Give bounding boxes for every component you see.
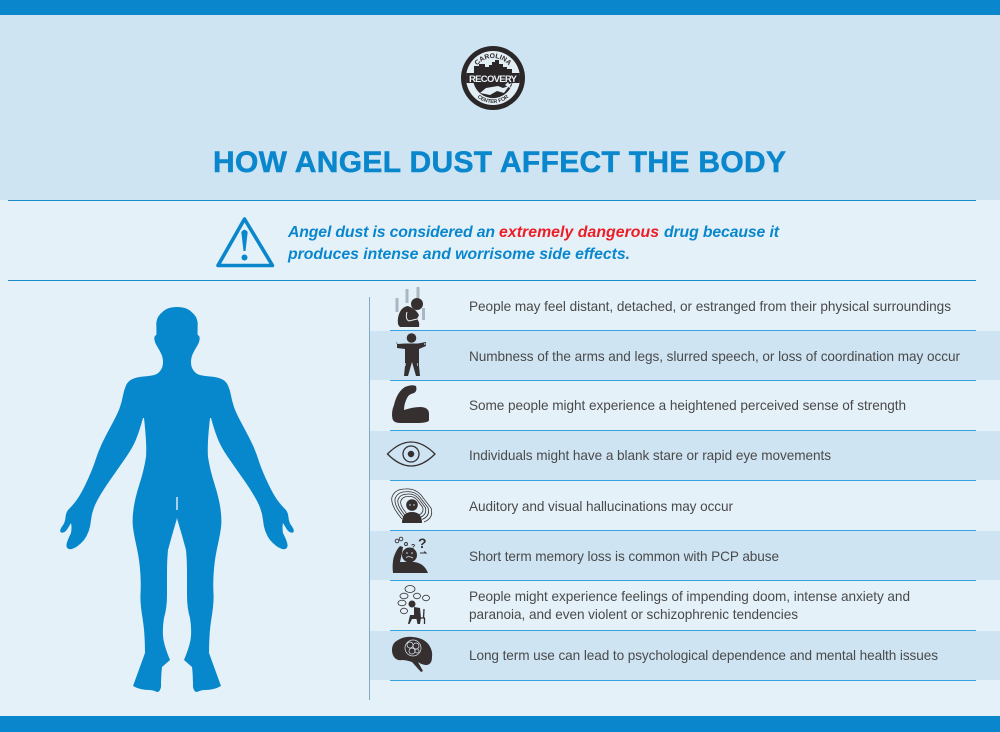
text: Some people might experience a heightened perceived sense of strength — [469, 398, 906, 413]
header background — [0, 15, 1000, 200]
row bands — [370, 331, 1000, 680]
callout dividers — [8, 200, 976, 281]
body silhouette — [60, 307, 294, 692]
icon: flexed arm — [392, 385, 429, 423]
callout text: produces intense and worrisome side effects. — [287, 246, 630, 263]
icon: confused person with question marks: ? — [411, 544, 415, 551]
icon: head with concentric waves — [392, 489, 432, 523]
text: People may feel distant, detached, or estranged from their physical surroundings — [469, 299, 951, 314]
callout text — [287, 224, 780, 263]
callout text: extremely dangerous — [499, 224, 659, 241]
effect 1: detachment — [396, 287, 951, 327]
logo: Carolina Recovery Center: CENTER FOR — [478, 95, 508, 104]
top bar — [0, 0, 1000, 15]
icon: confused person with question marks — [393, 535, 428, 573]
effect 6: memory loss — [393, 535, 779, 573]
icon: eye — [388, 442, 435, 466]
icon: confused person with question marks: ? — [418, 535, 427, 551]
effect 7: anxiety — [398, 586, 910, 624]
text: Auditory and visual hallucinations may occur — [469, 499, 733, 514]
text: Numbness of the arms and legs, slurred speech, or loss of coordination may occur — [469, 349, 960, 364]
effect 8: dependence — [392, 637, 938, 672]
logo: Carolina Recovery Center: CAROLINA — [474, 53, 511, 66]
text: Short term memory loss is common with PCP abuse — [469, 549, 779, 564]
effect 5: hallucinations — [392, 489, 733, 523]
text: People might experience feelings of impending doom, intense anxiety and — [469, 589, 910, 604]
text — [469, 589, 910, 622]
text: paranoia, and even violent or schizophrenic tendencies — [469, 607, 798, 622]
icon: seated person with thought bubbles — [398, 586, 430, 624]
title: HOW ANGEL DUST AFFECT THE BODY — [213, 146, 786, 179]
vertical divider — [369, 297, 370, 700]
text: Long term use can lead to psychological dependence and mental health issues — [469, 648, 938, 663]
bottom bar — [0, 716, 1000, 732]
logo: Carolina Recovery Center — [461, 46, 525, 110]
icon: hunched figure — [396, 287, 425, 327]
callout text: Angel dust is considered an — [287, 224, 495, 241]
icon: brain — [392, 637, 432, 672]
effect 2: numbness — [396, 333, 960, 376]
logo: Carolina Recovery Center: RECOVERY — [469, 74, 518, 85]
callout text: drug because it — [664, 224, 780, 241]
icon: warning triangle — [218, 219, 272, 266]
icon: figure with tingling limbs — [396, 333, 426, 376]
effect 4: eyes — [388, 442, 831, 466]
text: Individuals might have a blank stare or rapid eye movements — [469, 448, 831, 463]
effect 3: strength — [392, 385, 906, 423]
